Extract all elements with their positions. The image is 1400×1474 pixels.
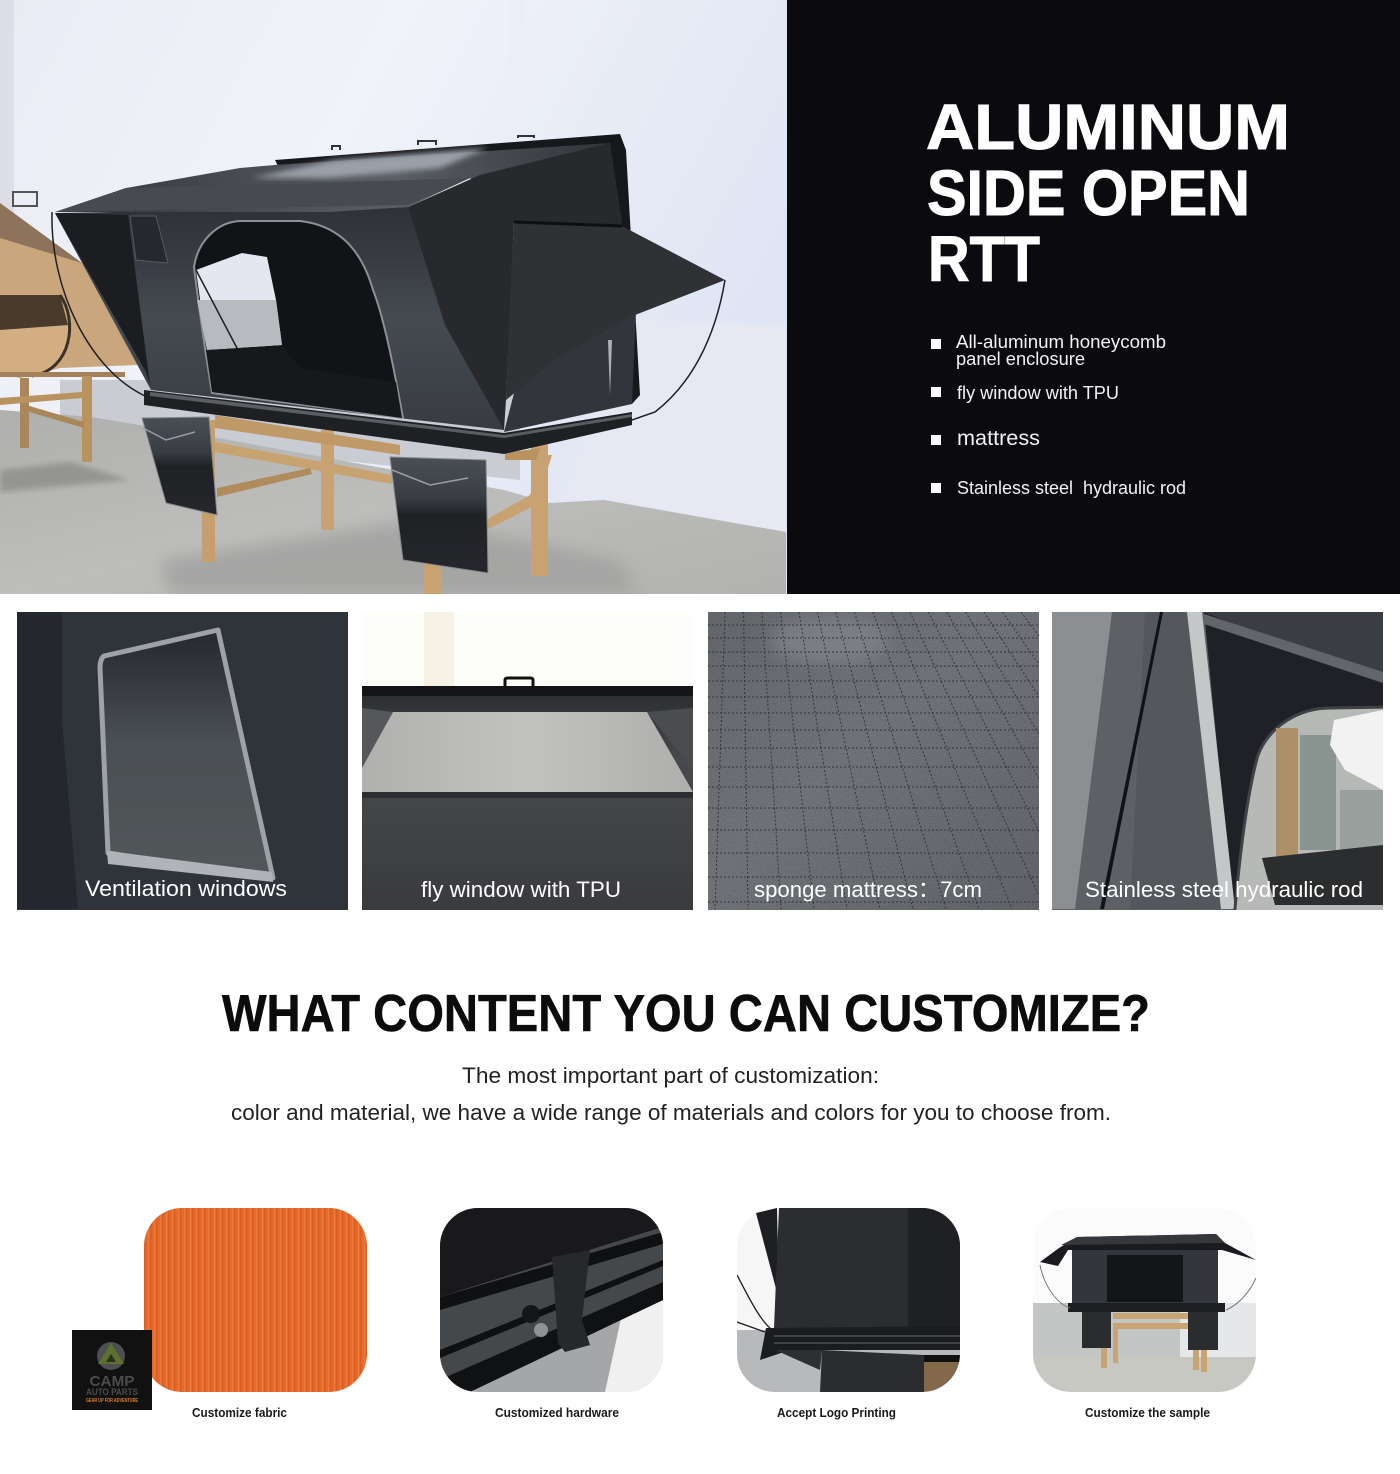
icon: Camp Auto Parts logo: GEAR UP FOR ADVENTURE bbox=[86, 1398, 139, 1404]
icon: roof handle bbox=[505, 678, 533, 687]
roof handles bbox=[332, 136, 534, 150]
icon: Camp Auto Parts logo: AUTO PARTS bbox=[86, 1387, 138, 1397]
wooden table frame bbox=[202, 415, 552, 594]
hydraulic rod bbox=[1187, 612, 1235, 909]
panel: customize fabric swatch bbox=[144, 1208, 367, 1392]
panel: customized hardware photo bbox=[440, 1208, 663, 1392]
roof fly bbox=[55, 143, 622, 223]
caption: Stainless steel hydraulic rod bbox=[1085, 877, 1363, 902]
heading: WHAT CONTENT YOU CAN CUSTOMIZE? bbox=[222, 985, 1150, 1043]
caption: sponge mattress：7cm bbox=[754, 877, 982, 902]
gear bbox=[97, 1342, 125, 1370]
awning flap bbox=[506, 222, 725, 400]
tie ropes bbox=[52, 212, 725, 420]
side fly panel bbox=[408, 143, 622, 430]
tent body bbox=[55, 207, 504, 430]
title: ALUMINUM bbox=[926, 91, 1290, 163]
tent shape bbox=[1072, 1245, 1218, 1303]
side body behind awning bbox=[504, 312, 636, 432]
icon: latch bbox=[552, 1250, 590, 1352]
panel: sponge mattress photo bbox=[708, 612, 1039, 910]
text block: intro bbox=[231, 1063, 1111, 1125]
caption: accept logo printing: Accept Logo Printing bbox=[777, 1405, 896, 1420]
caption: customize the sample: Customize the sample bbox=[1085, 1405, 1210, 1420]
icon: Camp Auto Parts logo: CAMP bbox=[90, 1373, 134, 1390]
pocket bbox=[820, 1350, 924, 1392]
caption: customize fabric: Customize fabric bbox=[192, 1405, 287, 1420]
feature list: Stainless steel hydraulic rod bbox=[957, 478, 1186, 498]
text block: intro: color and material, we have a wide range of materials and colors for you to choose from. bbox=[231, 1100, 1111, 1125]
text block: intro: The most important part of customization: bbox=[462, 1063, 879, 1088]
aluminium base platform bbox=[144, 390, 632, 454]
quilted grid bbox=[708, 612, 1039, 910]
panel: hydraulic rod photo bbox=[1052, 612, 1390, 920]
panel: fly window with TPU photo bbox=[362, 612, 693, 910]
legs bbox=[1101, 1313, 1207, 1372]
panel: ventilation windows photo bbox=[17, 612, 348, 910]
title bbox=[926, 91, 1290, 295]
tent window view bbox=[1234, 707, 1390, 920]
icon: Camp Auto Parts logo bbox=[72, 1330, 152, 1410]
tent door opening bbox=[194, 221, 403, 418]
title: RTT bbox=[928, 223, 1040, 295]
rear hard shell rim bbox=[275, 134, 640, 404]
title: SIDE OPEN bbox=[927, 157, 1250, 229]
panel: logo printing photo bbox=[737, 1208, 960, 1392]
left storage pocket bbox=[142, 417, 217, 515]
right storage pocket bbox=[390, 457, 488, 573]
caption: Ventilation windows bbox=[85, 876, 287, 901]
panel: hero photo of tent bbox=[0, 0, 787, 594]
feature list: All-aluminum honeycomb bbox=[956, 332, 1166, 352]
caption: customized hardware: Customized hardware bbox=[495, 1405, 619, 1420]
panel: dark title block bbox=[787, 0, 1400, 594]
panel: sample tent photo bbox=[1033, 1234, 1256, 1392]
feature list: mattress bbox=[957, 427, 1040, 450]
feature list: panel enclosure bbox=[956, 349, 1085, 369]
icon: vent window frame bbox=[100, 630, 273, 878]
feature list bbox=[931, 332, 1186, 498]
background tan tent bbox=[0, 192, 138, 462]
caption: fly window with TPU bbox=[421, 877, 621, 902]
TPU window sheet bbox=[362, 712, 693, 792]
feature list: fly window with TPU bbox=[957, 383, 1119, 403]
